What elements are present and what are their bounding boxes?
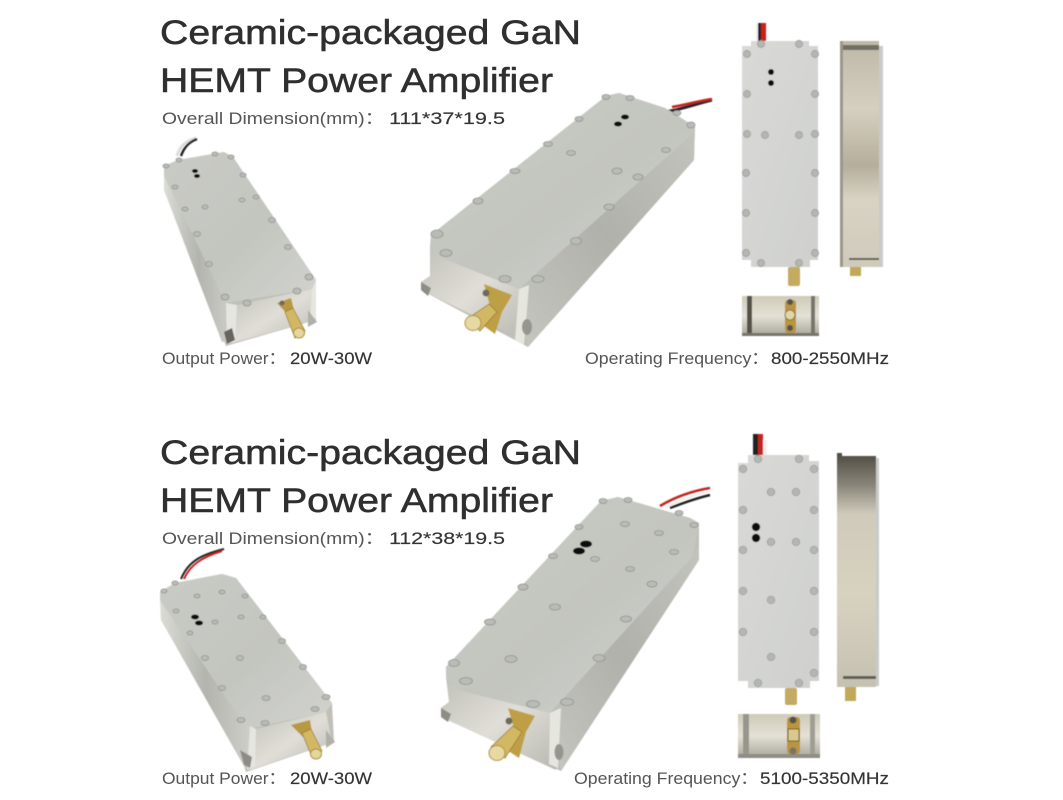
text: overall dimension: Overall Dimension(mm)： (162, 529, 384, 548)
text: output power: Output Power： (162, 769, 286, 788)
text: output power (162, 769, 372, 788)
text: output power: 20W-30W (290, 349, 372, 368)
text: operating frequency: Operating Frequency： (574, 769, 758, 788)
text: operating frequency: 800-2550MHz (771, 349, 889, 368)
title: upper (160, 14, 581, 100)
text: output power (162, 349, 372, 368)
text: operating frequency (574, 769, 889, 788)
text: overall dimension: 112*38*19.5 (389, 529, 505, 548)
product photo: end view (742, 296, 819, 336)
text: operating frequency: Operating Frequency： (585, 349, 769, 368)
panel: lower product (160, 434, 889, 788)
text: operating frequency (585, 349, 889, 368)
title: upper: Ceramic-packaged GaN (160, 14, 581, 52)
text: overall dimension (162, 529, 505, 548)
product photo: small amplifier, angled view (163, 138, 317, 346)
text: overall dimension: Overall Dimension(mm)： (162, 109, 384, 128)
product photo: top view (742, 23, 819, 286)
text: overall dimension: 111*37*19.5 (389, 109, 505, 128)
product photo: large amplifier, angled view (441, 488, 710, 771)
product photo: end view (738, 714, 820, 758)
product photo: top view (738, 434, 819, 705)
title: lower: HEMT Power Amplifier (160, 482, 553, 520)
text: operating frequency: 5100-5350MHz (760, 769, 889, 788)
product photo: small amplifier, angled view (160, 549, 335, 772)
text: overall dimension (162, 109, 505, 128)
product photo: side view (837, 453, 879, 701)
text: output power: Output Power： (162, 349, 286, 368)
title: lower (160, 434, 581, 520)
title: upper: HEMT Power Amplifier (160, 62, 553, 100)
product photo: large amplifier, angled view (421, 93, 712, 347)
text: output power: 20W-30W (290, 769, 372, 788)
title: lower: Ceramic-packaged GaN (160, 434, 581, 472)
panel: upper product (160, 14, 889, 368)
product photo: side view (840, 41, 883, 276)
